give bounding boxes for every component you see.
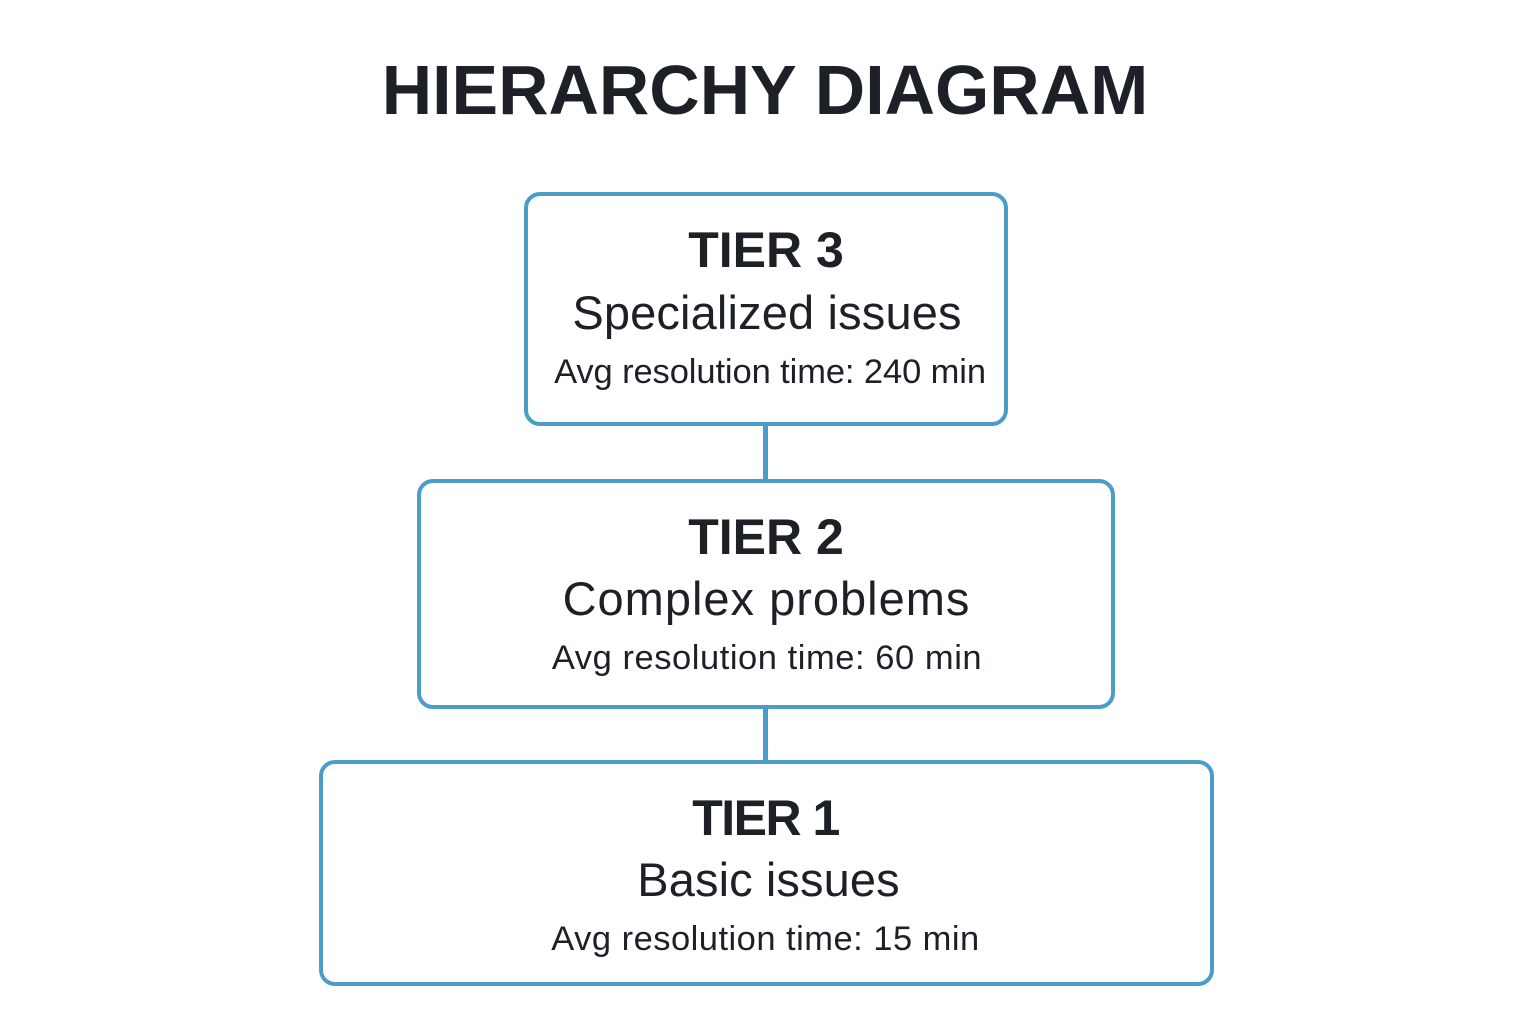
- tier 2 resolution time: Avg resolution time: 60 min: [552, 638, 982, 676]
- tier 1 resolution time: Avg resolution time: 15 min: [551, 920, 980, 958]
- tier 3 heading: TIER 3: [688, 222, 844, 278]
- tier 2 description: Complex problems: [563, 572, 970, 624]
- tier 3 resolution time: Avg resolution time: 240 min: [554, 352, 986, 390]
- tier 3 description: Specialized issues: [572, 286, 962, 338]
- connector: tier 3 to tier 2: [763, 424, 768, 482]
- panel: tier 2: [417, 479, 1115, 709]
- tier 1 description: Basic issues: [637, 852, 900, 906]
- tier 1 heading: TIER 1: [692, 790, 839, 846]
- tier 2 heading: TIER 2: [688, 508, 844, 564]
- title: HIERARCHY DIAGRAM: [382, 51, 1148, 129]
- panel: tier 1: [319, 760, 1214, 986]
- panel: tier 3: [524, 192, 1008, 426]
- connector: tier 2 to tier 1: [763, 706, 768, 762]
